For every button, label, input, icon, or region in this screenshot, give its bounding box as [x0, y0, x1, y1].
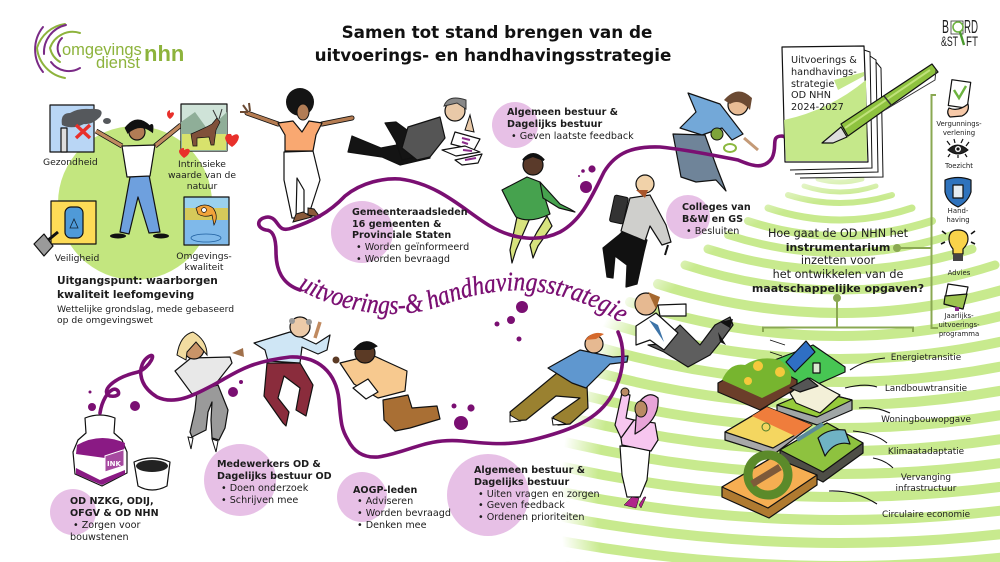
text block: AOGP: • Denken mee	[357, 520, 427, 531]
text block: Gemeenteraadsleden: Gemeenteraadsleden	[352, 207, 468, 218]
title	[315, 22, 671, 65]
text block: OD NZKG: OFGV & OD NHN	[70, 508, 159, 519]
document stack: OD NHN	[791, 90, 831, 101]
text: Wettelijke grondslag: op de omgevingswet	[57, 315, 153, 326]
label Intrinsieke waarde: Intrinsieke	[178, 159, 226, 170]
figure: bald man with tablet	[603, 175, 671, 287]
hearts	[167, 110, 239, 158]
label Veiligheid: Veiligheid	[55, 253, 99, 264]
document stack: handhavings-	[791, 67, 857, 78]
instrument: Vergunningsverlening: verlening	[943, 129, 975, 137]
text block: Medewerkers: Medewerkers OD &	[217, 459, 321, 470]
title: uitvoerings- en handhavingsstrategie	[315, 45, 671, 65]
background: green radiating stripes	[563, 178, 1000, 562]
labels maatschappelijke opgaven: Vervanging	[901, 473, 951, 483]
label Omgevingskwaliteit	[176, 251, 232, 273]
text: Wettelijke grondslag	[57, 304, 234, 326]
label Intrinsieke waarde: natuur	[187, 181, 217, 192]
heading Uitgangspunt: Uitgangspunt: waarborgen	[57, 275, 218, 287]
icon: deer nature	[181, 104, 227, 151]
text block: OD NZKG: OD NZKG, ODIJ,	[70, 496, 154, 507]
instrument: Handhaving: having	[946, 216, 970, 224]
figure: bending woman with magnifier	[673, 91, 758, 191]
label Gezondheid: Gezondheid	[43, 157, 98, 168]
question text	[752, 227, 924, 295]
connector curves to labels	[829, 358, 893, 504]
text block: Algemeen bestuur bottom: Dagelijks bestuur	[474, 477, 569, 488]
logo: Bord & Stift: &ST	[941, 33, 958, 49]
block: housing	[777, 378, 852, 425]
instrument: Advies	[941, 230, 975, 277]
document stack	[782, 46, 883, 178]
icon: fish in water	[184, 197, 229, 245]
text block: Colleges: B&W en GS	[682, 214, 743, 225]
question text: instrumentarium	[786, 241, 890, 254]
title: Samen tot stand brengen van de	[342, 22, 652, 42]
green circle backdrop	[58, 126, 212, 280]
purple ink dots	[88, 165, 596, 430]
text block: Gemeenteraadsleden: • Worden geïnformeerd	[356, 242, 469, 253]
connector to instruments	[894, 95, 938, 328]
instrument: Toezicht: Toezicht	[944, 162, 973, 170]
block: infrastructure	[780, 423, 863, 482]
text block: Gemeenteraadsleden: 16 gemeenten &	[352, 219, 442, 230]
text block: Algemeen bestuur bottom	[474, 465, 600, 523]
labels maatschappelijke opgaven: Energietransitie	[891, 353, 961, 363]
figure: man in patterned sweater	[332, 342, 440, 431]
figure: woman in green shirt	[502, 154, 575, 263]
label Omgevingskwaliteit: Omgevings-	[176, 251, 232, 262]
block: energy	[767, 340, 845, 392]
instrument: Jaarlijks uitvoeringsprogramma: Jaarlijks-	[943, 312, 974, 320]
block: farm	[718, 358, 797, 410]
icon: ink bottle and cup: INK	[107, 460, 122, 468]
labels maatschappelijke opgaven	[881, 353, 971, 520]
text block: Algemeen bestuur top: Dagelijks bestuur	[507, 119, 602, 130]
figure: man pushing the line	[510, 333, 628, 425]
figure: older man in blue shirt	[254, 317, 330, 426]
logo: Bord & Stift: B	[942, 17, 949, 37]
text block: Colleges: • Besluiten	[686, 226, 739, 237]
text block: Medewerkers: • Doen onderzoek	[221, 483, 309, 494]
label Intrinsieke waarde	[168, 159, 236, 192]
text block: Medewerkers: • Schrijven mee	[221, 495, 298, 506]
text block: Gemeenteraadsleden: • Worden bevraagd	[356, 254, 450, 265]
text block: Gemeenteraadsleden	[352, 207, 469, 265]
text block: Algemeen bestuur top	[507, 107, 634, 142]
logo: Bord & Stift: FT	[966, 33, 978, 49]
text block: Medewerkers	[217, 459, 332, 506]
instrument: Handhaving: Hand-	[948, 207, 969, 215]
question text: het ontwikkelen van de	[773, 268, 903, 281]
document stack: strategie	[791, 79, 834, 90]
labels maatschappelijke opgaven: Woningbouwopgave	[881, 415, 971, 425]
logo: omgevingsdienst nhn: nhn	[144, 41, 184, 66]
icon: barrel and lock	[34, 201, 96, 256]
heading Uitgangspunt: kwaliteit leefomgeving	[57, 289, 194, 301]
instrument: Jaarlijks uitvoeringsprogramma: programma	[939, 330, 979, 338]
labels maatschappelijke opgaven: Landbouwtransitie	[885, 384, 967, 394]
instrument: Advies: Advies	[948, 269, 971, 277]
text block: Algemeen bestuur bottom: • Ordenen prioriteiten	[478, 512, 584, 523]
labels maatschappelijke opgaven: Klimaatadaptatie	[888, 447, 964, 457]
instrument: Jaarlijks uitvoeringsprogramma	[938, 284, 980, 338]
label Intrinsieke waarde: waarde van de	[168, 170, 236, 181]
text block: Colleges	[682, 202, 751, 237]
text block: Algemeen bestuur top: Algemeen bestuur &	[507, 107, 618, 118]
instrument: Handhaving	[945, 178, 971, 224]
question text: inzetten voor	[801, 254, 875, 267]
panel: uitgangspunt leefomgeving	[34, 104, 239, 326]
instrument: Vergunningsverlening	[936, 80, 982, 137]
text block: AOGP: • Worden bevraagd	[357, 508, 451, 519]
figure: flying man in shirt and tie	[635, 292, 733, 367]
pink blobs	[50, 102, 710, 536]
text block: OD NZKG: • Zorgen voor	[73, 520, 140, 531]
logo: omgevingsdienst nhn: omgevings	[62, 41, 142, 59]
document stack: 2024-2027	[791, 102, 844, 113]
text: Wettelijke grondslag: Wettelijke grondslag, mede gebaseerd	[57, 304, 234, 315]
logo: Bord & Stift	[941, 17, 978, 49]
question text: maatschappelijke opgaven?	[752, 282, 924, 295]
logo: Bord & Stift: RD	[964, 17, 978, 37]
text block: AOGP	[353, 485, 451, 531]
text block: AOGP: • Adviseren	[357, 496, 413, 507]
text block: Medewerkers: Dagelijks bestuur OD	[217, 471, 332, 482]
text block: Algemeen bestuur top: • Geven laatste feedback	[511, 131, 634, 142]
text block: Gemeenteraadsleden: Provinciale Staten	[352, 230, 451, 241]
text block: Algemeen bestuur bottom: Algemeen bestuur &	[474, 465, 585, 476]
text block: Colleges: Colleges van	[682, 202, 751, 213]
heading Uitgangspunt	[57, 275, 218, 301]
logo: omgevingsdienst nhn: dienst	[96, 54, 140, 72]
instrument: Vergunningsverlening: Vergunnings-	[936, 120, 982, 128]
icon: green pen	[822, 64, 938, 143]
text block: AOGP: AOGP-leden	[353, 485, 417, 496]
text block: OD NZKG: bouwstenen	[70, 532, 129, 543]
document stack: Uitvoerings &	[791, 55, 857, 66]
papers	[442, 132, 482, 165]
labels maatschappelijke opgaven: Circulaire economie	[882, 510, 970, 520]
icon: factory smoke	[50, 105, 111, 152]
figure: woman with headscarf	[615, 388, 658, 508]
label Omgevingskwaliteit: kwaliteit	[185, 262, 224, 273]
connector to maatschappelijke opgaven	[763, 295, 913, 332]
text block: Algemeen bestuur bottom: • Geven feedback	[478, 500, 565, 511]
logo: omgevingsdienst nhn	[35, 24, 184, 78]
question text: Hoe gaat de OD NHN het	[768, 227, 909, 240]
instrument: Toezicht	[944, 139, 973, 170]
isometric blocks: maatschappelijke opgaven	[718, 340, 863, 518]
block: circular economy	[722, 455, 817, 518]
script heading along the line: uitvoerings-& handhavingsstrategie	[300, 272, 626, 321]
block: climate map	[725, 407, 812, 455]
purple line	[100, 135, 822, 457]
icon: ink bottle and cup	[73, 415, 170, 490]
labels maatschappelijke opgaven: infrastructuur	[896, 484, 957, 494]
central figure with raised arms	[96, 121, 181, 238]
figure: flying man in dark suit	[348, 98, 482, 165]
figure: blonde woman	[175, 332, 244, 452]
instrument: Jaarlijks uitvoeringsprogramma: uitvoerings-	[938, 321, 980, 329]
text block: OD NZKG	[70, 496, 159, 543]
text block: Algemeen bestuur bottom: • Uiten vragen en zorgen	[478, 489, 600, 500]
figure: woman in orange shirt	[240, 88, 352, 222]
